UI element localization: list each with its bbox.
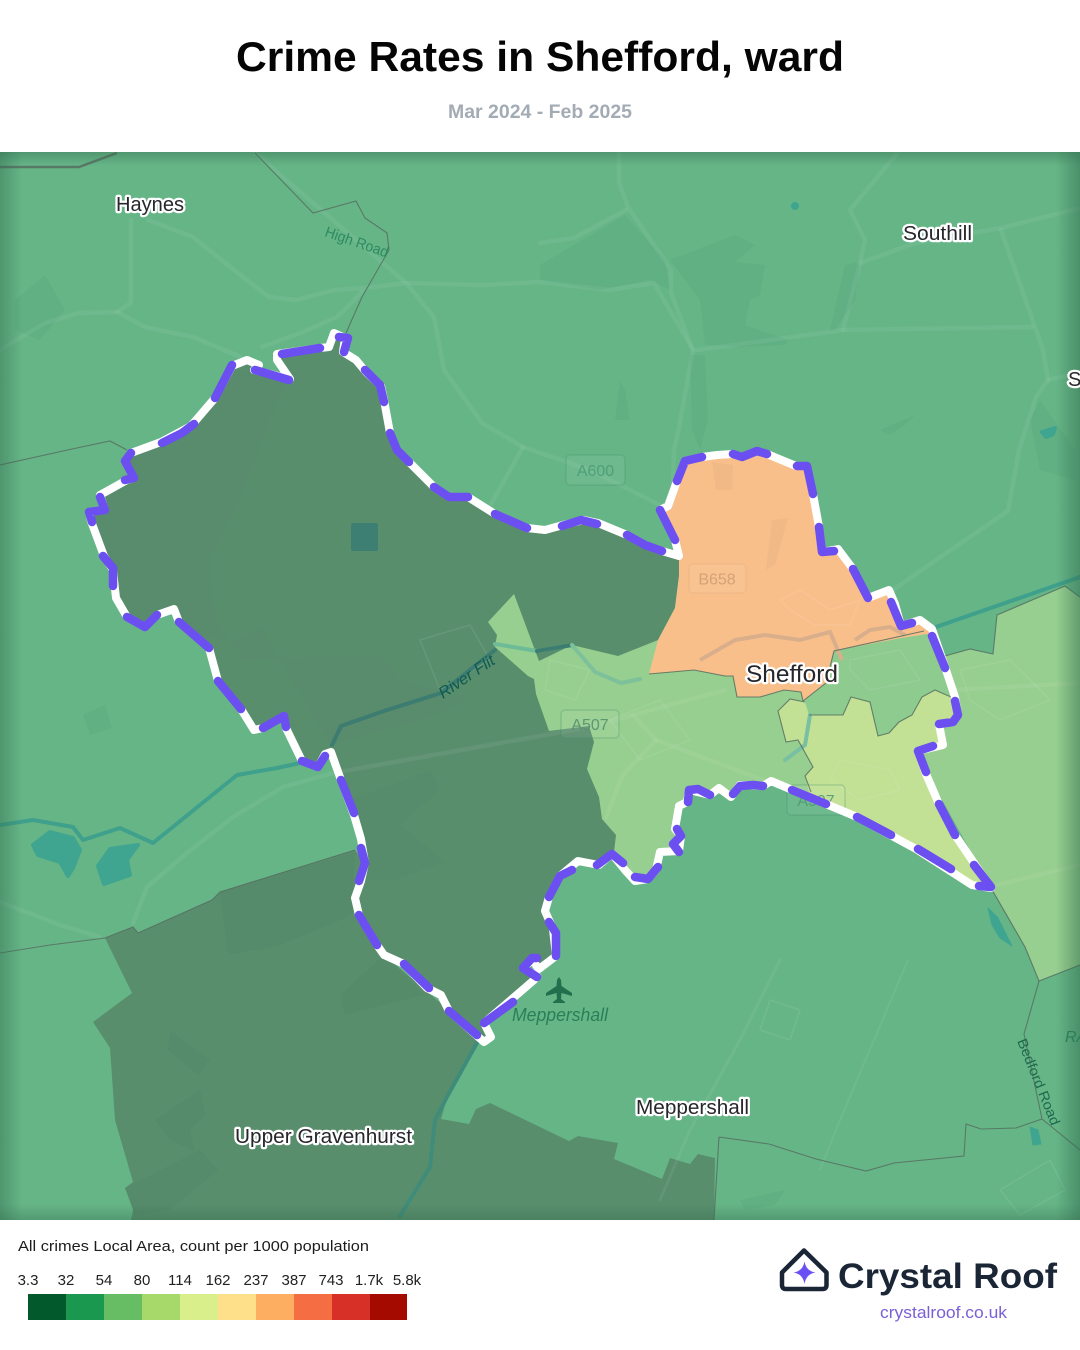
legend scale values (18, 1272, 422, 1289)
title: Crime Rates in Shefford, ward (236, 33, 844, 80)
choropleth map panel (0, 150, 1080, 1225)
label: Meppershall village: Meppershall (636, 1097, 749, 1119)
south-west dark ward (93, 850, 715, 1225)
legend scale values: 1.7k (355, 1272, 384, 1289)
label: Shefford: Shefford (746, 661, 838, 688)
legend scale values: 5.8k (393, 1272, 422, 1289)
label: River Flit: River Flit (436, 652, 499, 702)
parish boundaries (0, 153, 1080, 1220)
ward boundary: white line with purple dashes (89, 333, 991, 1042)
shield: A507 south: A507 (797, 793, 835, 810)
legend title: All crimes Local Area, count per 1000 population (18, 1238, 369, 1255)
roads (0, 150, 1080, 1200)
orange ward shading (712, 462, 788, 570)
shield: A507 south (787, 785, 845, 815)
subtitle: date range: Mar 2024 - Feb 2025 (448, 102, 632, 123)
purple dashes (89, 337, 991, 1035)
River Flit and canal (0, 577, 1080, 1216)
legend scale values: 162 (205, 1272, 231, 1289)
shield: A507 west: A507 (571, 717, 609, 734)
website url: crystalroof.co.uk (880, 1304, 1008, 1322)
darker patches in ward (90, 370, 470, 880)
shield: B658: B658 (698, 572, 736, 588)
vignette edges (0, 152, 1080, 1220)
shield: A507 west (561, 710, 619, 738)
legend colour bar (28, 1294, 407, 1320)
river through orange ward (700, 627, 905, 660)
shield: A600: A600 (577, 463, 614, 480)
legend scale values: 3.3 (18, 1272, 38, 1289)
label: Haynes: Haynes (116, 194, 184, 216)
label: Upper Gravenhurst: Upper Gravenhurst (235, 1126, 412, 1148)
legend scale values: 80 (134, 1272, 150, 1289)
Shefford ward shaded areas (80, 320, 1000, 1060)
brand logo (782, 1250, 1057, 1322)
legend scale values: 32 (58, 1272, 74, 1289)
legend (18, 1238, 422, 1320)
place labels (116, 194, 1080, 1148)
shield: B658 (700, 574, 735, 584)
woodland patches (15, 215, 1075, 1210)
legend scale values: 743 (318, 1272, 344, 1289)
town streets (420, 590, 1065, 1215)
legend scale values: 237 (243, 1272, 269, 1289)
darker patches in south-west ward (125, 1188, 135, 1210)
area: yellow-green south-east (778, 690, 982, 882)
label: High Road: High Road (323, 224, 391, 261)
label: Meppershall airfield: Meppershall (512, 1005, 609, 1025)
area: central green (806, 634, 950, 735)
area: light green south and west (488, 577, 812, 874)
wordmark: Crystal Roof (838, 1257, 1057, 1296)
shield: A600 (566, 455, 625, 485)
area: dark north-west (80, 320, 679, 1060)
legend scale values: 387 (281, 1272, 307, 1289)
pond in ward (351, 523, 378, 551)
icon: airfield plane (546, 977, 572, 1003)
legend scale values: 114 (168, 1272, 192, 1289)
lakes (33, 204, 1055, 1145)
map base (0, 152, 1080, 1220)
east light-green ward (920, 586, 1080, 981)
road number shields (561, 455, 845, 815)
area: orange north (649, 440, 940, 701)
label: Southill: Southill (903, 223, 972, 245)
legend scale values: 54 (96, 1272, 112, 1289)
icon: house with star (782, 1250, 826, 1289)
label: Bedford Road: Bedford Road (1014, 1036, 1064, 1127)
